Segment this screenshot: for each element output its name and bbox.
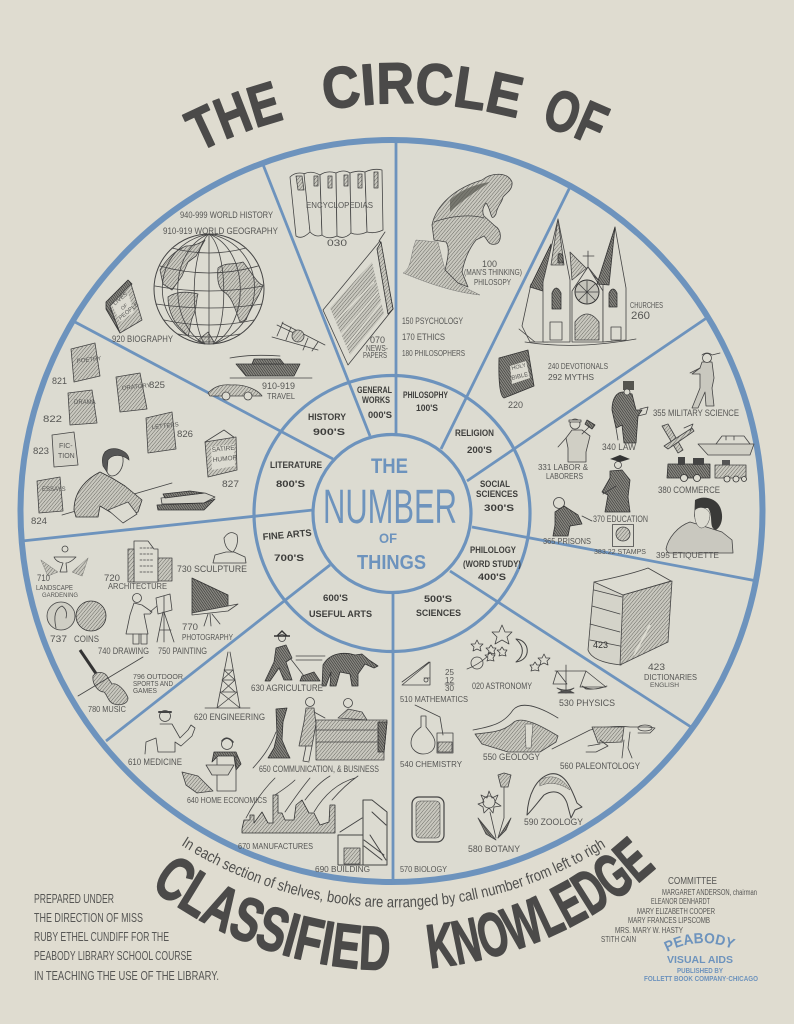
- icon: globe: [154, 234, 264, 344]
- panel: sciences: [400, 625, 655, 874]
- credit: committee: MRS. MARY W. HASTY: [615, 926, 684, 935]
- panel: fine arts: GARDENING: [42, 592, 78, 599]
- panel: fine arts: GAMES: [133, 688, 157, 695]
- icon: man writing: [62, 449, 172, 523]
- credit: committee: MARY FRANCES LIPSCOMB: [628, 916, 710, 925]
- icon: coins: [47, 601, 106, 631]
- icon: dictionary: 423: [593, 640, 608, 650]
- panel: sciences: 020 ASTRONOMY: [472, 681, 532, 691]
- centre hub: The Number of Things: NUMBER: [323, 481, 457, 534]
- ring labels: ten main classes: (WORD STUDY): [463, 559, 521, 570]
- icon: soldier with bugle: [690, 353, 720, 408]
- panel: philology dictionary: ENGLISH: [650, 682, 679, 689]
- icon: Drama book: DRAMA: [74, 400, 96, 406]
- ring labels: ten main classes: RELIGION: [455, 428, 494, 439]
- panel: social sciences: 365 PRISONS: [543, 537, 591, 546]
- panel: fine arts: 750 PAINTING: [158, 646, 207, 656]
- panel: history and geography: TRAVEL: [267, 392, 296, 401]
- panel: social sciences: 383.22 STAMPS: [594, 549, 646, 556]
- icon: cookery book: [182, 772, 213, 793]
- icon: Holy Bible: BIBLE: [511, 372, 529, 382]
- credit: committee: MARGARET ANDERSON, chairman: [662, 888, 757, 897]
- panel: sciences: 530 PHYSICS: [559, 698, 615, 708]
- credit: committee: MARY ELIZABETH COOPER: [637, 907, 715, 916]
- panel: literature: 827: [222, 479, 239, 490]
- panel: religion: 292 MYTHS: [548, 372, 594, 382]
- centre hub: The Number of Things: THE: [371, 455, 408, 478]
- panel: fine arts: 796 OUTDOOR: [133, 672, 184, 681]
- icon: Satire and Humor book: [205, 430, 238, 477]
- icon: pile of books: [157, 491, 215, 510]
- icon: woman with mixing bowl: [206, 738, 241, 791]
- icon: graduate: [602, 455, 630, 512]
- icon: triangle: [402, 662, 430, 685]
- panel: philology dictionary: [588, 568, 697, 689]
- icon: dinosaur skeleton: [552, 725, 655, 758]
- panel: history and geography: 910-919: [262, 381, 295, 392]
- panel: useful arts: 610 MEDICINE: [128, 757, 182, 767]
- panel: useful arts: 670 MANUFACTURES: [238, 842, 313, 851]
- panel: literature: 824: [31, 516, 47, 527]
- icon: policeman: [612, 381, 648, 443]
- centre hub: The Number of Things: [323, 455, 457, 574]
- title: The Circle Of: THE: [182, 80, 284, 148]
- panel: general works: NEWS-: [366, 344, 388, 353]
- icon: surgeon: [145, 710, 195, 754]
- icon: oil derrick: [205, 652, 250, 708]
- ring labels: ten main classes: 800'S: [276, 479, 305, 490]
- caption: curved instruction line: In each section of shelves, books are arranged by call number from left to right: [182, 836, 606, 910]
- icon: Fiction book: TION: [58, 453, 75, 460]
- title: The Circle Of: [182, 62, 611, 148]
- panel: philosophy: 100: [482, 259, 497, 270]
- title: The Circle Of: CIRCLE: [323, 62, 524, 118]
- publisher mark: Peabody Visual Aids: PEABODY: [664, 933, 736, 952]
- panel: useful arts: 620 ENGINEERING: [194, 712, 265, 722]
- icon: Poetry book: POETRY: [77, 356, 102, 365]
- title: Classified Knowledge: CLASSIFIED: [156, 858, 390, 970]
- panel: useful arts: 640 HOME ECONOMICS: [187, 796, 267, 805]
- ring labels: ten main classes: SCIENCES: [416, 608, 461, 619]
- panel: fine arts: 720: [104, 573, 120, 584]
- publisher mark: Peabody Visual Aids: PUBLISHED BY: [677, 968, 723, 975]
- panel: useful arts: 630 AGRICULTURE: [251, 683, 323, 693]
- panel: general works: PAPERS: [363, 351, 387, 360]
- title: Classified Knowledge: [156, 836, 656, 970]
- credit: prepared under: THE DIRECTION OF MISS: [34, 910, 143, 925]
- credit: prepared under: [34, 891, 219, 983]
- icon: newspaper: [323, 232, 393, 365]
- icon: flask and beaker: [411, 705, 453, 754]
- icon: Oratory book: ORATORY: [122, 383, 151, 392]
- icon: building under construction: [338, 800, 387, 865]
- numerals: addition sum: [445, 668, 454, 693]
- icon: encyclopedias: ENCYCLOPEDIAS: [306, 200, 373, 210]
- panel: sciences: 590 ZOOLOGY: [524, 817, 583, 827]
- wheel: rings and spokes: [20, 140, 762, 884]
- ring labels: ten main classes: 100'S: [416, 403, 438, 414]
- icon: Lives of People book: [106, 280, 142, 333]
- panel: philosophy: PHILOSOPY: [474, 278, 512, 287]
- ring labels: ten main classes: SCIENCES: [476, 489, 518, 500]
- icon: candlestick telephone: [253, 708, 290, 768]
- panel: sciences: 580 BOTANY: [468, 844, 520, 854]
- panel: useful arts: [128, 631, 387, 874]
- icon: geological cross-section: [473, 705, 558, 752]
- ring labels: ten main classes: USEFUL ARTS: [309, 609, 372, 620]
- icon: desk: [316, 698, 387, 760]
- icon: Letters book: [146, 412, 179, 453]
- panel: fine arts: [36, 533, 247, 714]
- icon: postage stamp: [612, 524, 634, 546]
- panel: social sciences: 340 LAW: [602, 442, 636, 453]
- icon: biplane: [272, 322, 325, 351]
- icon: flower: [478, 773, 511, 840]
- icon: automobile: [208, 385, 262, 400]
- panel: fine arts: 780 MUSIC: [88, 704, 126, 714]
- credit: prepared under: PREPARED UNDER: [34, 891, 114, 906]
- panel: useful arts: 650 COMMUNICATION, & BUSINESS: [259, 764, 379, 774]
- panel: religion: 220: [508, 400, 523, 410]
- credit: prepared under: PEABODY LIBRARY SCHOOL COURSE: [34, 948, 192, 963]
- ring labels: ten main classes: WORKS: [362, 395, 390, 406]
- icon: Holy Bible: HOLY: [511, 363, 527, 372]
- panel: social sciences: 380 COMMERCE: [658, 485, 720, 495]
- icon: Holy Bible: [499, 350, 534, 398]
- icon: painter at easel: [126, 594, 174, 644]
- icon: ocean liner: [230, 355, 312, 378]
- panel: philology dictionary: 423: [648, 662, 665, 673]
- icon: labourer with hammer: [558, 419, 595, 462]
- panel: philosophy: 170 ETHICS: [402, 332, 445, 343]
- icon: Poetry book: [71, 343, 102, 382]
- panel: social sciences: 370 EDUCATION: [593, 514, 648, 524]
- panel: literature: 825: [149, 380, 165, 391]
- panel: philosophy: 150 PSYCHOLOGY: [402, 316, 463, 327]
- icon: locomotive and tender: [667, 457, 746, 482]
- panel: useful arts: 690 BUILDING: [315, 864, 370, 874]
- panel: fine arts: 740 DRAWING: [98, 646, 149, 656]
- panel: history and geography: 910-919 WORLD GEOGRAPHY: [163, 226, 279, 237]
- ring labels: ten main classes: LITERATURE: [270, 460, 322, 471]
- icon: Essays book: ESSAYS: [42, 487, 66, 493]
- panel: social sciences: [538, 353, 754, 560]
- panel: religion: 260: [631, 310, 650, 322]
- icon: factories and smoke: [242, 776, 358, 833]
- icon: Satire and Humor book: HUMOR: [212, 454, 238, 464]
- panel: social sciences: 355 MILITARY SCIENCE: [653, 408, 739, 418]
- panel: social sciences: LABORERS: [546, 472, 583, 481]
- icon: bellows camera: [192, 578, 238, 626]
- credit: committee: [601, 876, 757, 944]
- panel: fine arts: 770: [182, 622, 198, 633]
- icon: steamship: [698, 436, 754, 455]
- ring labels: ten main classes: SOCIAL: [480, 479, 510, 490]
- numerals: addition sum: 25: [445, 668, 454, 677]
- icon: elegant woman: [666, 498, 733, 553]
- publisher mark: Peabody Visual Aids: [644, 933, 758, 983]
- icon: Drama book: [68, 390, 97, 425]
- ring labels: ten main classes: 000'S: [368, 410, 392, 421]
- icon: Oratory book: [116, 373, 151, 412]
- icon: aeroplane: [662, 424, 694, 453]
- publisher mark: Peabody Visual Aids: FOLLETT BOOK COMPANY·CHICAGO: [644, 976, 758, 983]
- panel: sciences: 510 MATHEMATICS: [400, 695, 468, 704]
- icon: Lives of People book: PEOPLE: [118, 302, 140, 322]
- panel: general works: [290, 169, 393, 365]
- centre hub: The Number of Things: THINGS: [357, 552, 426, 574]
- panel: literature: 822: [43, 414, 62, 425]
- panel: philosophy: 180 PHILOSOPHERS: [402, 349, 465, 358]
- ring labels: ten main classes: HISTORY: [308, 412, 347, 423]
- icon: leaping fish: [527, 774, 582, 818]
- panel: fine arts: LANDSCAPE: [36, 585, 73, 592]
- ring labels: ten main classes: [262, 385, 521, 620]
- icon: Letters book: LETTERS: [152, 422, 179, 431]
- icon: biology cell: [412, 797, 444, 842]
- title: Classified Knowledge: KNOWLEDGE: [426, 836, 656, 969]
- icon: Lives of People book: LIVES: [112, 292, 129, 307]
- ring labels: ten main classes: 300'S: [484, 503, 514, 514]
- ring labels: ten main classes: 500'S: [424, 594, 452, 605]
- icon: balance scales: [553, 665, 607, 693]
- ring labels: ten main classes: 900'S: [313, 427, 345, 438]
- centre hub: The Number of Things: OF: [379, 530, 397, 546]
- ring labels: ten main classes: PHILOLOGY: [470, 545, 517, 556]
- ring labels: ten main classes: GENERAL: [357, 385, 392, 396]
- icon: violin and bow: [78, 650, 143, 705]
- credit: committee: COMMITTEE: [668, 876, 717, 887]
- icon: prisoner seated: [553, 498, 592, 536]
- ring labels: ten main classes: PHILOSOPHY: [403, 390, 448, 401]
- icon: Fiction book: FIC-: [59, 443, 73, 450]
- credit: committee: STITH CAIN: [601, 935, 636, 944]
- panel: religion: [499, 219, 663, 410]
- panel: literature: 826: [177, 429, 193, 440]
- panel: social sciences: 331 LABOR &: [538, 462, 588, 472]
- panel: sciences: 550 GEOLOGY: [483, 752, 540, 762]
- panel: fine arts: ARCHITECTURE: [108, 581, 167, 591]
- panel: social sciences: 395 ETIQUETTE: [656, 550, 719, 560]
- panel: religion: CHURCHES: [630, 300, 663, 310]
- icon: farmer ploughing with mule: [265, 631, 378, 686]
- ring labels: ten main classes: 700'S: [274, 553, 304, 564]
- icon: office clerk and customer: [299, 698, 325, 762]
- panel: philosophy: (MAN'S THINKING): [464, 268, 522, 277]
- ring labels: ten main classes: FINE ARTS: [262, 528, 312, 543]
- panel: fine arts: 737: [50, 634, 67, 645]
- icon: encyclopedias: [290, 169, 383, 238]
- icon: Essays book: [37, 477, 66, 513]
- panel: general works: 070: [370, 335, 385, 345]
- numerals: addition sum: 30: [445, 684, 454, 693]
- panel: religion: 240 DEVOTIONALS: [548, 361, 608, 371]
- panel: history and geography: [106, 210, 325, 401]
- icon: sculpted bust: [213, 533, 246, 563]
- credit: prepared under: RUBY ETHEL CUNDIFF FOR THE: [34, 929, 169, 944]
- panel: literature: 821: [52, 376, 67, 387]
- ring labels: ten main classes: 200'S: [467, 445, 492, 456]
- panel: sciences: 570 BIOLOGY: [400, 865, 448, 874]
- numerals: addition sum: 12: [445, 676, 454, 685]
- icon: stars, moon and planet: [467, 625, 550, 671]
- icon: Satire and Humor book: SATIRE: [211, 445, 236, 454]
- panel: literature: [31, 343, 239, 527]
- panel: general works: 030: [327, 238, 347, 249]
- panel: sciences: 560 PALEONTOLOGY: [560, 761, 640, 771]
- panel: sciences: 540 CHEMISTRY: [400, 759, 462, 769]
- ring labels: ten main classes: 400'S: [478, 572, 506, 583]
- panel: philosophy: [402, 174, 522, 358]
- credit: committee: ELEANOR DENHARDT: [651, 897, 710, 906]
- title: The Circle Of: OF: [546, 90, 611, 140]
- icon: Lives of People book: OF: [120, 303, 129, 312]
- publisher mark: Peabody Visual Aids: VISUAL AIDS: [667, 954, 733, 966]
- icon: Fiction book: [52, 432, 78, 467]
- panel: philology dictionary: DICTIONARIES: [644, 673, 697, 682]
- panel: history and geography: 940-999 WORLD HISTORY: [180, 210, 274, 221]
- icon: skyscrapers: [128, 541, 172, 582]
- credit: prepared under: IN TEACHING THE USE OF THE LIBRARY.: [34, 968, 219, 983]
- panel: fine arts: SPORTS AND: [133, 681, 173, 688]
- panel: fine arts: PHOTOGRAPHY: [182, 632, 233, 642]
- panel: fine arts: COINS: [74, 634, 99, 645]
- panel: fine arts: 710: [37, 573, 50, 584]
- icon: The Thinker statue: [403, 174, 512, 295]
- icon: church: [519, 219, 636, 345]
- ring labels: ten main classes: 600'S: [323, 593, 348, 604]
- icon: garden fountain: [41, 546, 88, 576]
- panel: literature: 823: [33, 446, 49, 457]
- panel: history and geography: 920 BIOGRAPHY: [112, 334, 174, 345]
- panel: fine arts: 730 SCULPTURE: [177, 564, 247, 575]
